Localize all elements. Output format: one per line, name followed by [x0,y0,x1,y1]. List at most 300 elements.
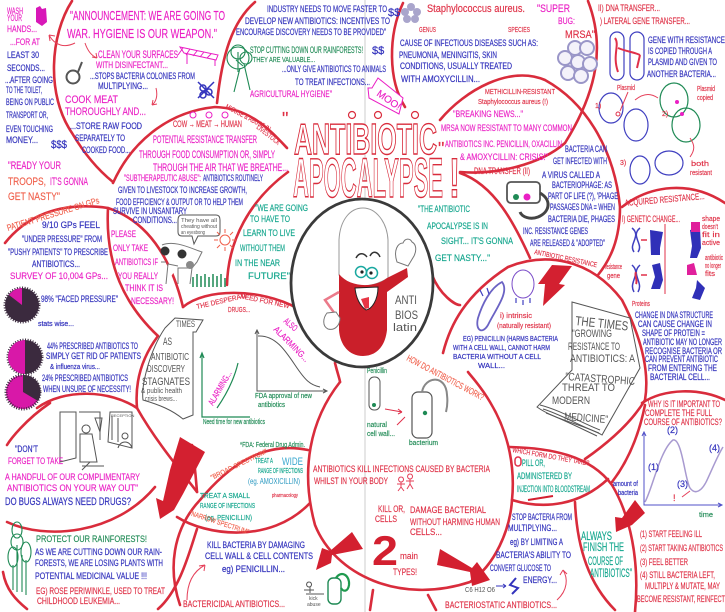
icon: plasmid diagram: Plasmid [697,86,715,93]
rainforest and agriculture text [250,45,386,99]
bactericidal description [205,540,313,574]
quote: learn to live without them: WITHOUT THEM [240,243,285,253]
joke and caption: "DON'T [15,444,38,454]
rainforest text: CHILDHOOD LEUKEMIA... [37,596,120,606]
antibiotics kill infections text: CELLS... [410,527,442,537]
antibios latin label: BIOS [395,308,418,322]
icon: two bacteria exchanging gene [610,32,644,80]
quote: learn to live without them: "WE ARE GOING [255,203,308,213]
antibiotics kill infections text: ANTIBIOTICS KILL INFECTIONS CAUSED BY BACTERIA [313,464,490,474]
icon: stick figure kicking bacterium: abuse [307,602,321,608]
phage text: BACTERIA DIE, PHAGES [548,214,615,224]
speech bubble: moo [368,78,403,114]
survey text: 9/10 GPs FEEL [42,220,100,230]
circle frame [291,199,433,367]
quote: learn to live without them: IN THE NEAR [235,258,280,268]
line chart: amount of bacteria over time: amount of [613,481,638,488]
superbug MRSA label: "SUPER [537,3,570,15]
line chart: amount of bacteria over time: time [699,512,713,519]
rainforest and agriculture text: ...ONLY GIVE ANTIBIOTICS TO ANIMALS [282,64,386,74]
staph text: SPECIES [508,27,530,34]
newspaper clipping: "CATASTROPHIC [565,371,635,388]
icon: plasmid diagram: 2) [662,111,668,118]
phage text: PASSAGES DNA = WHEN [550,202,615,212]
hygiene tips: COOK MEAT [65,94,118,106]
narrow range text: TREAT A SMALL [200,493,250,500]
rainforest and agriculture text: TO TREAT INFECTIONS... [295,77,370,87]
line chart: amount of bacteria over time: bacteria [618,490,638,497]
form text: INJECTION INTO BLOODSTREAM [517,484,590,494]
arrow: to bacteriostatic [437,549,490,586]
intrinsic resistance and examples: WALL... [478,363,505,370]
superbug MRSA label [537,3,595,41]
pie chart: 98 percent faced pressure: 98% "FACED PRESSURE" [41,294,118,304]
quote: learn to live without them: FUTURE" [248,271,290,281]
icon: cow [160,243,225,287]
icon: plasmid diagram: 3) [620,160,626,167]
rainforest and agriculture text: STOP CUTTING DOWN OUR RAINFORESTS! [250,45,363,55]
acquired resistance heading [622,191,705,224]
arrows [49,35,157,105]
hygiene tips [65,49,195,155]
wide range text: (eg. AMOXICILLIN) [248,477,300,486]
DNA transfer heading [598,3,690,26]
description: ENERGY... [523,575,557,585]
antibiotics kill infections text: CELLS [375,514,397,524]
industry text: ENCOURAGE DISCOVERY NEEDS TO BE PROVIDED" [236,27,386,37]
intrinsic resistance and examples: BACTERIA WITHOUT A CELL [453,354,541,361]
phage text [523,144,618,248]
two main types: 2 [372,527,398,574]
arc headings: LIVESTOCK [255,124,281,147]
industry text [236,4,400,57]
newspaper clipping: DISCOVERY [147,364,185,375]
phage text: BACTERIOPHAGE: AS [552,180,612,190]
phage text: INC. RESISTANCE GENES [523,226,588,236]
antibiotics kill infections text: DAMAGE BACTERIAL [410,505,486,515]
joke and caption: FORGET TO TAKE [8,456,63,466]
panel: central pill character [291,199,433,367]
pie chart: 98 percent faced pressure: stats wise... [38,321,74,328]
narrow range text: (eg. PENICILLIN) [205,515,252,522]
resistance transfer text [113,134,288,225]
broad spectrum label: "BROAD SPECTRUM" [210,448,269,482]
newspaper clipping: ANTIBIOTICS: A [570,353,636,365]
gene explanation [647,35,725,79]
antibiotics kill infections text: WHILST IN YOUR BODY [314,476,388,486]
icon: MRSA cluster [558,41,597,83]
staph text: GENUS [419,27,436,34]
chart: FDA approval [255,316,327,409]
pill face [355,252,380,310]
icon: DNA and protein diagram: active [702,240,720,247]
wide range text: RANGE OF INFECTIONS [258,468,303,475]
quote: learn to live without them [235,203,308,281]
text: APOCALYPSE [293,146,443,209]
line chart: amount of bacteria over time: (2) [667,425,678,435]
heading [644,399,722,427]
wide range text: WIDE [282,456,303,468]
cartoon: doctor's office: RECEPTION [111,413,134,418]
rainforest text: POTENTIAL MEDICINAL VALUE !!! [35,571,147,581]
joke and caption: ANTIBIOTICS ON YOUR WAY OUT" [7,483,138,493]
panel: protect rainforests [8,522,165,606]
line chart: amount of bacteria over time: (1) [648,462,659,472]
survey text [8,220,108,281]
icon: tree [227,45,252,92]
icon: plasmid diagram: copied [697,95,713,102]
icon: DNA and protein diagram: doesn't [702,224,718,231]
quote: apocalypse in sight [418,204,513,263]
callout: always finish the course [581,529,632,580]
DNA transfer heading: II) DNA TRANSFER... [598,3,660,13]
diagram: penicillin vs bacterium: cell wall... [367,431,395,438]
heading: how do antibiotics work: HOW DO ANTIBIOTICS WORK? [405,353,486,402]
staph text: CONDITIONS, USUALLY TREATED [400,61,512,71]
icon: table being cleaned [178,47,218,66]
line chart: amount of bacteria over time: ! [673,493,676,503]
phage text: BACTERIA CAN [565,144,607,154]
newspaper clipping: RESISTANCE TO [568,341,620,353]
please text: THINK IT IS [125,283,163,293]
arrow: big center [156,437,205,519]
chart: need for new antibiotics [200,353,265,426]
phage text: ARE RELEASED & "ADOPTED" [530,238,605,248]
icons: resistant and intrinsic bacteria [477,270,534,330]
quote: apocalypse in sight: "THE ANTIBIOTIC [418,204,470,214]
diagram: penicillin vs bacterium: natural [367,422,387,429]
panel: bacteriophage [507,144,618,269]
pie chart: 24 percent: WHEN UNSURE OF NECESSITY! [43,384,131,394]
narrow range text: RANGE OF INFECTIONS [200,503,255,510]
panel: the times resistance clipping [537,265,640,436]
resistance transfer text: "SUBTHERAPEUTIC ABUSE": [124,173,201,183]
rainforest and agriculture text: AGRICULTURAL HYGIENE" [250,89,332,99]
panel: bacteriostatic antibiotics [445,512,572,610]
icon: DNA and protein diagram [605,216,723,308]
form text: ADMINISTERED BY [517,471,572,481]
FDA footnote: *FDA: Federal Drug Admin. [240,442,305,449]
icon: plasmid diagram: 1) [595,103,601,110]
industry text: INDUSTRY NEEDS TO MOVE FASTER TO [267,4,387,14]
resistance transfer text: GIVEN TO LIVESTOCK TO INCREASE GROWTH, [118,185,247,195]
pie chart: 24 percent: 24% PRESCRIBED ANTIBIOTICS [42,373,128,383]
icon: pill body [324,208,416,356]
panel: how antibiotics work [313,270,558,586]
diagram: penicillin vs bacterium [367,368,447,447]
wash your hands text: HANDS... [7,24,37,34]
title: ! [449,146,460,209]
icon: DNA and protein diagram: Proteins [632,301,650,308]
resistance transfer text: THROUGH THE AIR THAT WE BREATHE... [153,162,288,174]
heading [196,292,290,314]
icon: DNA and protein diagram: fits [705,271,716,278]
heading: WHICH FORM DO THEY TAKE? [512,447,590,468]
hygiene tips: COOKED FOOD... [82,145,130,155]
glucose to energy: C6 H12 O6 [465,587,495,594]
arrow: to finish course [615,500,645,532]
panel: acquired resistance [605,191,723,382]
newspaper clipping: THREAT TO [562,382,615,394]
icon: germs [198,82,214,98]
icon: pill [515,457,521,466]
quote: learn to live without them: TO HAVE TO [250,214,290,224]
arrow: curved up [557,570,567,600]
icon: phage [507,182,548,218]
cartoon: doctor's office [60,412,134,470]
resistance transfer text: FOOD EFFICIENCY & OUTPUT OR TO HELP THEM [116,197,243,207]
rainforest text [35,534,165,606]
icon: DNA and protein diagram: resistance [605,264,622,271]
chart: FDA approval: ALARMING... [272,324,311,364]
description: STOP BACTERIA FROM [512,512,572,522]
speech bubble: cow: cheating without [181,224,218,230]
wash your hands text: EVEN TOUCHING [6,124,53,134]
joke and caption [5,444,140,508]
callout: always finish the course: COURSE OF [588,554,623,568]
survey text: "PUSHY PATIENTS" TO PRESCRIBE [8,247,108,257]
joke and caption: DO BUGS ALWAYS NEED DRUGS? [5,496,131,508]
quote: ready your troops: TROOPS, [8,176,46,188]
panel: bactericidal antibiotics [183,540,349,609]
wide range text [248,456,303,486]
panel: industry and rainforests [227,4,403,114]
pie chart: 24 percent [6,373,131,409]
MRSA breaking news: Staphylococcus aureus (!) [478,99,548,106]
small label: pharmacology [272,493,298,499]
icon: staph cluster [401,3,421,23]
please text: PLEASE [111,229,136,239]
wash your hands text: YOUR [7,13,22,23]
quote: ready your troops: GET NASTY" [8,191,60,203]
staph text: WITH AMOXYCILLIN... [401,74,480,84]
chart: need for new antibiotics: ALARMING... [206,369,234,407]
pill arms and hands [324,239,416,329]
rainforest and agriculture text: THEY ARE VALUABLE... [253,57,315,64]
icon: sun [214,229,236,251]
arc headings: MISUSE & ABUSE IN [224,104,271,133]
resistance transfer text: SURVIVE IN UNSANITARY [113,206,187,216]
speech bubble: moo: MOO! [374,88,402,113]
label: BACTERIOSTATIC ANTIBIOTICS... [445,600,557,610]
MRSA breaking news: ANTIBIOTICS INC. PENICILLIN, OXACILLIN [445,139,562,149]
resistance transfer text: CONDITIONS... [133,215,177,225]
newspaper clipping: THE TIMES [575,313,629,334]
phage text: PART OF LIFE (?), 'PHAGE [548,191,618,201]
newspaper clipping: AS [163,336,172,348]
industry text: $$ [372,45,384,57]
antibios latin label: latin [393,322,417,334]
speech bubble: cow [178,215,220,244]
icon: plasmid diagram: Plasmid [617,85,635,92]
bactericidal description: CELL WALL & CELL CONTENTS [205,551,313,561]
MRSA breaking news: MRSA NOW RESISTANT TO MANY COMMON [441,123,572,133]
label: antibiotic resistance: ANTIBIOTIC RESISTANCE [534,249,598,269]
quote: ready your troops: IT'S GONNA [50,176,88,188]
icon: trees [8,522,31,595]
antibiotics kill infections text: KILL OR, [378,504,405,514]
MRSA breaking news: & AMOXYCILLIN: CRISIS!" [460,152,548,162]
description: eg) BY LIMITING A [510,537,563,547]
two main types: TYPES! [393,567,417,577]
newspaper clipping: ANTIBIOTIC [151,352,189,363]
newspaper clipping: TIMES [176,319,195,329]
resistance transfer text: ANTIBIOTICS ROUTINELY [203,173,263,183]
icon: plasmid diagram [595,83,715,184]
MRSA breaking news: "BREAKING NEWS..." [453,109,523,119]
description: CONVERT GLUCOSE TO [490,563,551,573]
quote: ready your troops: "READY YOUR [8,160,61,172]
heading: THE DESPERATE [196,292,249,311]
arc heading: PATIENT PRESSURE ON GPs [6,195,101,233]
numbered list: (3) FEEL BETTER [640,557,688,567]
title: " [282,109,288,129]
newspaper clipping: "GROWING [572,328,612,340]
icon: syringe [528,496,553,500]
panel: staphylococcus [399,3,597,176]
chart: need for new antibiotics: Need time for new antibiotics [203,419,265,426]
icon: DNA and protein diagram: fit in [702,232,720,239]
wash your hands text: ...AFTER GOING [5,75,53,85]
icon row: cow meat human [173,112,242,129]
wash your hands text [5,6,67,151]
panel: hygiene announcement [49,8,225,155]
panel: why complete the course [613,399,725,604]
survey text: "UNDER PRESSURE" FROM [22,234,102,244]
rainforest text: PROTECT OUR RAINFORESTS! [36,534,147,544]
quote: ready your troops [8,160,88,203]
speech bubble: cow: an eyesbong [181,230,205,236]
diagram: penicillin vs bacterium: Penicillin [367,368,387,375]
line chart: amount of bacteria over time: (4) [709,443,720,453]
joke and caption: A HANDFUL OF OUR COMPLIMENTARY [5,472,140,482]
title [282,109,460,209]
superbug MRSA label: MRSA" [565,29,595,41]
newspaper clipping: & public health [141,388,182,395]
wide range text: TREAT A [255,458,273,465]
title: ANTIBIOTIC [294,115,437,164]
panel: DNA transfer [595,3,725,184]
pie chart: 98 percent faced pressure [5,288,118,328]
diagram: penicillin vs bacterium: bacterium [409,440,438,447]
wash your hands text: ...FOR AT [10,37,40,47]
chart: FDA approval: antibiotics [258,402,285,409]
phage text: A VIRUS CALLED A [542,170,600,180]
wash your hands text: WASH [7,6,23,16]
intrinsic resistance and examples: i) intrinsic [500,313,533,320]
hygiene tips: ...STOPS BACTERIA COLONIES FROM [90,71,195,81]
pie chart: 44 percent: SIMPLY GET RID OF PATIENTS [46,351,141,361]
panel: desperate need for new drugs [141,292,327,426]
MRSA breaking news: METHICILLIN-RESISTANT [485,89,556,96]
line chart: amount of bacteria over time [613,425,723,519]
description: MULTIPLYING... [508,523,557,533]
intrinsic resistance and examples: WITH A CELL WALL, CANNOT HARM [453,345,550,352]
hygiene tips: MULTIPLYING... [98,81,148,91]
intrinsic resistance and examples: EG) PENICILLIN (HARMS BACTERIA [463,336,558,343]
speech bubble: cow: They have all [181,218,217,224]
line chart: amount of bacteria over time: (3) [677,479,688,489]
please text [111,229,174,306]
heading: DRUGS... [228,307,250,314]
form text: PILL OR, [522,458,545,468]
wash your hands text: BEING ON PUBLIC [6,97,54,107]
MRSA breaking news [441,89,572,176]
panel: agricultural misuse [111,104,288,306]
wash your hands text: MONEY... [6,135,38,145]
panel: spectrum eye [188,442,305,536]
please text: NECESSARY! [131,296,174,306]
hygiene tips: THOROUGHLY AND... [65,106,146,118]
form text [517,458,590,494]
phage text: GET INFECTED WITH [553,156,607,166]
antibiotics kill infections text [313,464,500,537]
two main types [372,527,418,577]
rainforest text: FORESTS, WE ARE LOSING PLANTS WITH [35,558,163,568]
hygiene tips: WITH DISINFECTANT... [96,60,168,70]
icon row: cow meat human: COW → MEAT → HUMAN [173,119,242,129]
callout: always finish the course: FINISH THE [583,540,624,554]
panel: patient pressure on GPs [5,195,141,409]
newspaper clipping [141,318,203,419]
resistance transfer text: POTENTIAL RESISTANCE TRANSFER [153,134,257,146]
hygiene tips: ...STORE RAW FOOD [70,121,142,131]
intrinsic resistance and examples: (naturally resistant) [497,323,551,330]
icon: hand [36,6,47,26]
pie chart: 44 percent [8,340,141,374]
please text: ANTIBIOTICS IF [115,257,158,267]
DNA structure explanation [635,310,722,382]
numbered list [637,529,725,604]
chart: FDA approval: ALSO [282,316,300,333]
MRSA breaking news: DNA TRANSFER (II) [474,166,530,176]
antibios latin label [393,293,418,334]
survey text: ANTIBIOTICS... [32,259,80,269]
quote: apocalypse in sight: GET NASTY..." [435,253,490,263]
wash your hands text: $$$ [51,139,67,151]
callout: always finish the course: ANTIBIOTICS" [590,566,632,580]
arrow: curved up [187,565,205,600]
icon: stick figure kicking bacterium: kick [309,596,318,602]
two main types: main [400,551,418,561]
narrow spectrum label: "NARROW SPECTRUM" [188,510,250,536]
description: BACTERIA'S ABILITY TO [496,550,571,560]
title: " [438,139,444,159]
heading: NEED FOR NEW [240,293,290,310]
please text: YOU REALLY [118,271,158,281]
icon: frying pan [66,62,82,84]
description [490,512,572,585]
icon: stick people [397,474,414,491]
staph text [399,3,538,84]
newspaper clipping: MODERN [552,395,590,407]
wash your hands text: TRANSPORT OR, [6,110,48,120]
label: BACTERICIDAL ANTIBIOTICS... [183,599,285,609]
heading: announcement: WAR. HYGIENE IS OUR WEAPON." [67,26,217,41]
newspaper clipping: STAGNATES [142,376,190,388]
panel: hand washing [5,6,88,203]
heading: announcement [67,8,225,41]
hygiene tips: SEPARATELY TO [75,133,125,143]
newspaper clipping: MEDICINE" [564,411,609,426]
industry text: $$ [388,7,400,19]
pie chart: 44 percent: & influenza virus... [50,364,100,371]
icon: DNA and protein diagram: gene [607,273,620,280]
wash your hands text: SECONDS... [7,63,45,73]
staph text: Staphylococcus aureus. [427,3,525,15]
wash your hands text: LEAST 30 [7,50,39,60]
staph text: PNEUMONIA, MENINGITIS, SKIN [399,50,497,60]
